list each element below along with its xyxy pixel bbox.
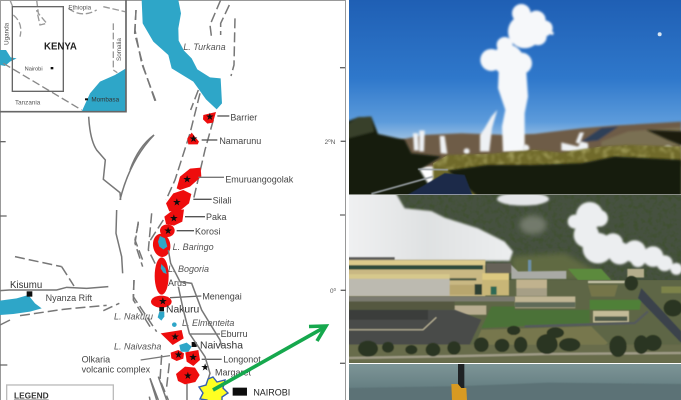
lakes and volcanoes south of Baringo: 0⁰ [330,288,336,295]
legend box [7,385,113,400]
volcano: Namarunu: Namarunu [219,136,261,146]
lake: L. Turkana: L. Turkana [183,42,226,52]
volcano: Eburru: ★ [171,332,180,343]
Olkaria volcano: ★ [174,350,183,361]
inset map of Kenya: Mombasa [91,97,120,104]
lakes and volcanoes south of Baringo [133,213,346,400]
west: Kisumu and Nyanza Rift: Nyanza Rift [46,293,93,303]
volcano: Korosi [160,224,220,237]
icon: yellow star site marker [199,377,228,400]
volcano: Paka: Paka [206,212,226,222]
Nakuru [158,305,200,321]
panel: geothermal power plant aerial photo [341,188,681,363]
L. Baringo: L. Baringo [173,242,214,252]
inset map of Kenya: Uganda [3,22,10,45]
L. Bogoria [155,257,209,295]
forest slopes [511,216,611,281]
volcano: Eburru [161,329,248,345]
volcano: Menengai: ★ [158,297,167,308]
inset map of Kenya: Nairobi [25,66,43,72]
Olkaria volcano [171,350,184,361]
volcano: Namarunu [187,133,261,146]
volcano: Margaret: ★ [201,363,210,374]
volcano: Suswa: ★ [183,371,192,382]
west: Kisumu and Nyanza Rift [0,210,170,400]
volcano: Margaret: Margaret [215,367,251,377]
volcano: Longonot: Longonot [223,355,261,365]
volcano: Paka [164,209,226,226]
volcano: Menengai [151,291,242,308]
west: Kisumu and Nyanza Rift: Kisumu [10,280,42,291]
L. Baringo [151,233,214,258]
volcano: Paka: ★ [169,214,178,225]
inset map of Kenya: Ethiopia [68,4,92,11]
forest texture [348,195,681,281]
Arus: Arus [168,278,187,288]
volcano: Eburru: Eburru [221,329,248,339]
west: Kisumu and Nyanza Rift: Olkaria [82,355,110,365]
smoke cloud: right [568,202,681,275]
panel: third photo with crane [348,364,681,400]
volcano: Margaret [201,363,251,377]
steam plumes: secondary [413,110,674,158]
bushes [433,145,681,200]
inset map of Kenya: Tanzania [15,99,41,106]
volcano: Emuruangogolak: ★ [183,174,192,185]
volcano: Emuruangogolak [177,168,294,190]
power plant buildings [348,257,644,323]
Nakuru: Nakuru [166,305,200,316]
west: Kisumu and Nyanza Rift: L. Nakuru [114,311,153,321]
volcano: Menengai: Menengai [202,291,242,301]
volcano: Korosi: Korosi [195,227,220,237]
Naivasha: Naivasha [200,340,243,351]
crane [451,364,467,400]
inset map of Kenya: Somalia [116,38,123,61]
road [371,169,473,196]
smoke cloud: top centre [497,192,549,206]
Lake Victoria [0,295,42,315]
steam plume: main [480,4,554,152]
lawns, trees and roads [348,276,681,363]
Nairobi label [233,388,290,398]
volcano: Silali [166,190,232,211]
panel: geothermal steam landscape photo [341,0,681,200]
volcano: Korosi: ★ [164,226,173,237]
volcano: Namarunu: ★ [189,134,198,145]
inset map of Kenya: KENYA [44,41,77,52]
volcano: Silali: Silali [213,196,232,206]
volcano: Longonot [185,350,261,366]
fault lines north-west [0,10,155,200]
L. Bogoria: L. Bogoria [168,264,209,274]
panel: Kenya Rift map [0,0,347,400]
lake: L. Turkana [130,0,346,200]
arrow: green pointer to photos [213,326,326,390]
volcano: Barrier: Barrier [230,113,257,123]
volcano: Barrier [203,112,257,124]
switchyard [348,296,515,345]
fault lines of rift [149,250,222,400]
inset map of Kenya [0,0,126,112]
L. Elmenteita: L. Elmenteita [182,318,234,328]
Nairobi label: NAIROBI [253,388,290,398]
volcano: Longonot: ★ [189,353,198,364]
volcano: Silali: ★ [172,198,181,209]
volcano: Barrier: ★ [205,112,214,123]
Naivasha [179,340,243,352]
volcano: Emuruangogolak: Emuruangogolak [225,174,294,184]
sunlit bush texture [431,143,681,170]
west: Kisumu and Nyanza Rift: L. Naivasha [114,341,161,351]
smoke cloud: left [341,188,513,261]
volcano: Suswa [176,367,200,400]
lake: L. Turkana: 2⁰N [325,139,336,146]
west: Kisumu and Nyanza Rift: volcanic complex [82,365,151,375]
distant hills [391,122,681,167]
